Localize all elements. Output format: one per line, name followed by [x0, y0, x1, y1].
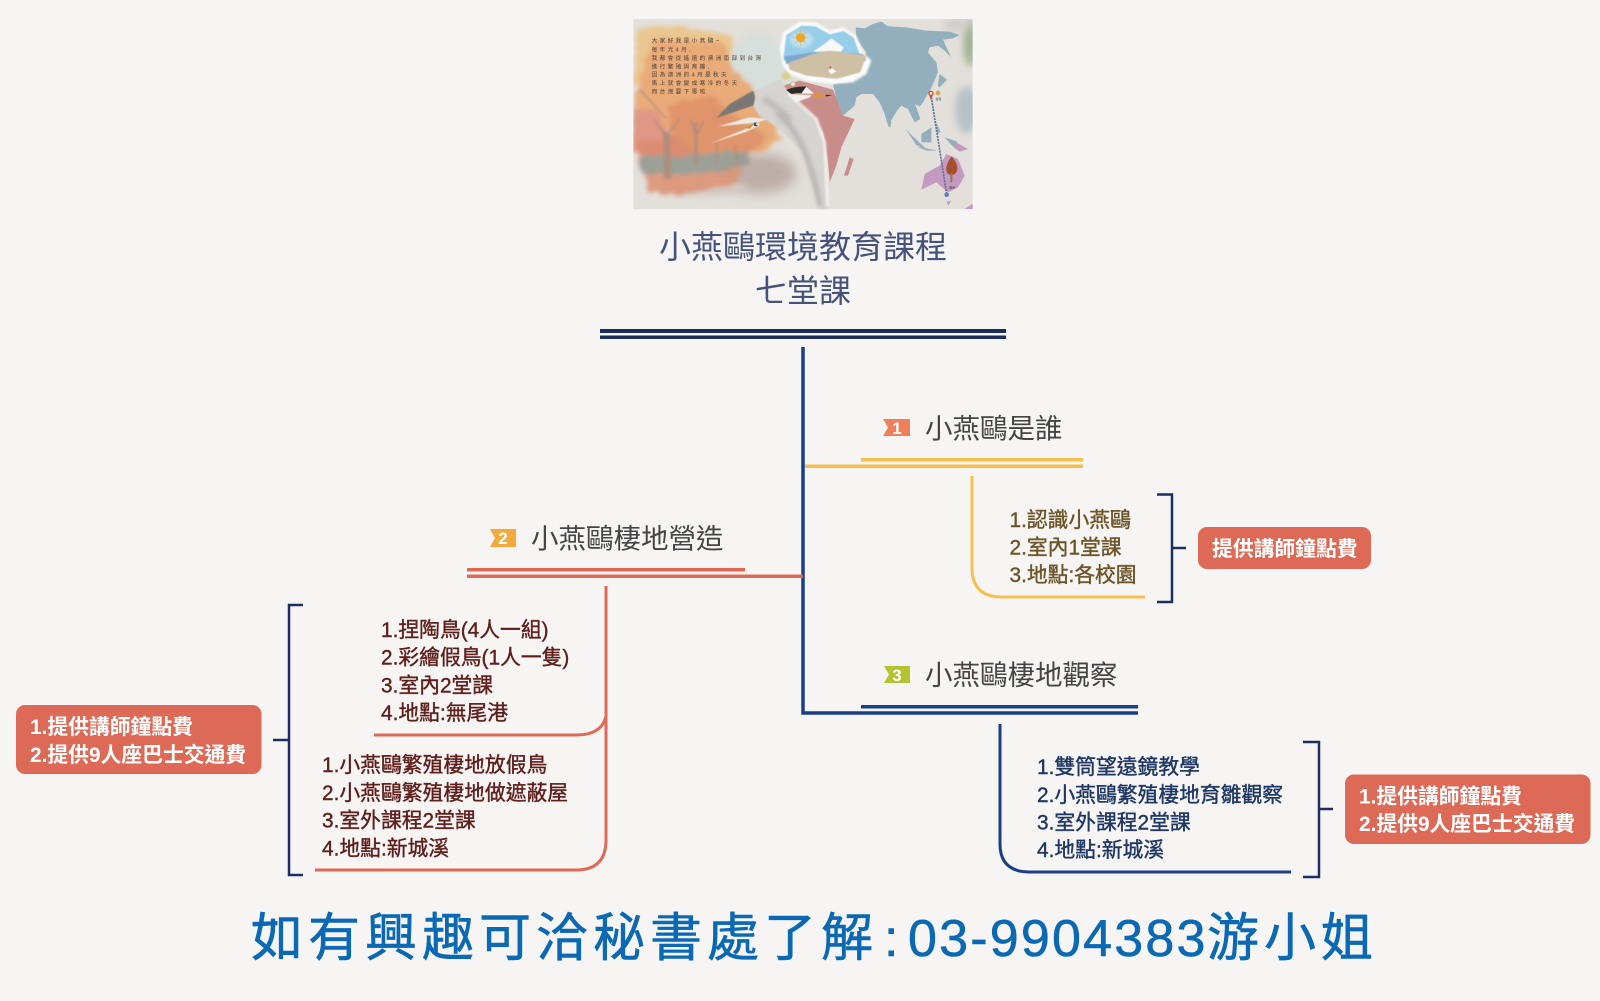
callout 1: [1198, 527, 1371, 569]
migration route: [929, 91, 957, 197]
yellow connector: [972, 476, 1145, 597]
list 2a: 3.室內2堂課: [381, 674, 493, 698]
footer contact line: 03-9904383: [908, 910, 1208, 968]
title double rule: [600, 329, 1006, 339]
list 3: [1037, 756, 1283, 862]
thought cloud: [780, 22, 871, 86]
list 1: [1010, 509, 1137, 587]
poem text: 我都會從遙遠的澳洲南部到台灣: [652, 54, 764, 62]
list 2b: 1.小燕鷗繁殖棲地放假鳥: [322, 754, 547, 777]
title: 小燕鷗環境教育課程: [659, 229, 947, 265]
list 2a: [381, 619, 569, 725]
icon: ribbon 2: [490, 529, 516, 548]
bird: [710, 79, 832, 209]
icon: ribbon 3: 3: [892, 666, 902, 685]
title: 七堂課: [755, 273, 851, 309]
list 1: 3.地點:各校園: [1010, 564, 1137, 587]
map: [783, 22, 973, 209]
icon: ribbon 1: [883, 419, 910, 438]
branch 1: 小燕鷗是誰: [805, 413, 1371, 602]
footer contact line: :: [884, 910, 903, 968]
red double rule: [467, 568, 803, 578]
list 2b: [322, 754, 568, 860]
icon: ribbon 3: [884, 666, 910, 685]
pale background tint: [731, 33, 787, 93]
smoke under trees: [723, 153, 797, 193]
callout 2: 1.提供講師鐘點費: [30, 716, 193, 739]
red connector: [315, 586, 606, 870]
title: [659, 229, 947, 309]
callout 2: [16, 705, 262, 774]
list 3: 3.室外課程2堂課: [1037, 812, 1191, 834]
list 2b: 2.小燕鷗繁殖棲地做遮蔽屋: [322, 782, 568, 805]
bracket 3: [1303, 742, 1333, 877]
callout 3: 1.提供講師鐘點費: [1359, 786, 1522, 808]
list 3: 2.小燕鷗繁殖棲地育雛觀察: [1037, 784, 1283, 807]
callout 2: 2.提供9人座巴士交通費: [30, 743, 246, 767]
poem text: 而台灣要下雪啦: [652, 87, 708, 95]
list 3: 4.地點:新城溪: [1037, 839, 1164, 862]
poem text: [652, 37, 764, 95]
heading 1: 小燕鷗是誰: [925, 413, 1062, 444]
list 2b: 4.地點:新城溪: [322, 838, 449, 860]
icon: ribbon 1: 1: [892, 419, 902, 438]
map: Australia: [921, 142, 973, 209]
bracket 2: [273, 605, 303, 875]
list 3: 1.雙筒望遠鏡教學: [1037, 756, 1200, 779]
blue rule: [861, 705, 1138, 708]
migration route: 澳洲: [949, 184, 955, 189]
callout 1: 提供講師鐘點費: [1212, 538, 1358, 561]
list 2a: 1.捏陶鳥(4人一組): [381, 619, 549, 642]
list 2b: 3.室外課程2堂課: [322, 810, 476, 832]
branch 2: 小燕鷗棲地營造: [16, 523, 803, 875]
list 1: 1.認識小燕鷗: [1010, 509, 1131, 532]
branch 3: 小燕鷗棲地觀察: [861, 660, 1590, 877]
map: Asia: [833, 22, 960, 151]
poem text: 馬上就會變成寒冷的冬天: [652, 79, 740, 87]
callout 3: [1345, 774, 1590, 844]
list 2a: 4.地點:無尾港: [381, 702, 508, 725]
poem text: 大家好我是小燕鷗~: [652, 37, 721, 45]
main trunk connector: [803, 347, 1138, 713]
map: Africa: [783, 81, 855, 182]
footer contact line: 如有興趣可洽秘書處了解: [251, 910, 878, 968]
poem text: 因為澳洲的4月是秋天: [652, 71, 729, 79]
illustration: little tern migration map: [633, 19, 978, 209]
migration route: 台灣: [935, 96, 941, 101]
list 1: 2.室內1堂課: [1010, 536, 1122, 560]
bracket 1: [1157, 494, 1186, 602]
navy connector: [1000, 724, 1291, 872]
heading 2: 小燕鷗棲地營造: [531, 523, 724, 554]
heading 3: 小燕鷗棲地觀察: [925, 660, 1118, 690]
poem text: 每年光4月,: [652, 45, 693, 53]
icon: ribbon 2: 2: [498, 529, 508, 548]
poem text: 進行繁殖與育雛,: [652, 62, 712, 70]
footer contact line: 游小姐: [1207, 910, 1378, 968]
autumn trees: [633, 26, 780, 196]
yellow double rule: [805, 458, 1083, 468]
callout 3: 2.提供9人座巴士交通費: [1359, 812, 1575, 836]
list 2a: 2.彩繪假鳥(1人一隻): [381, 646, 569, 670]
